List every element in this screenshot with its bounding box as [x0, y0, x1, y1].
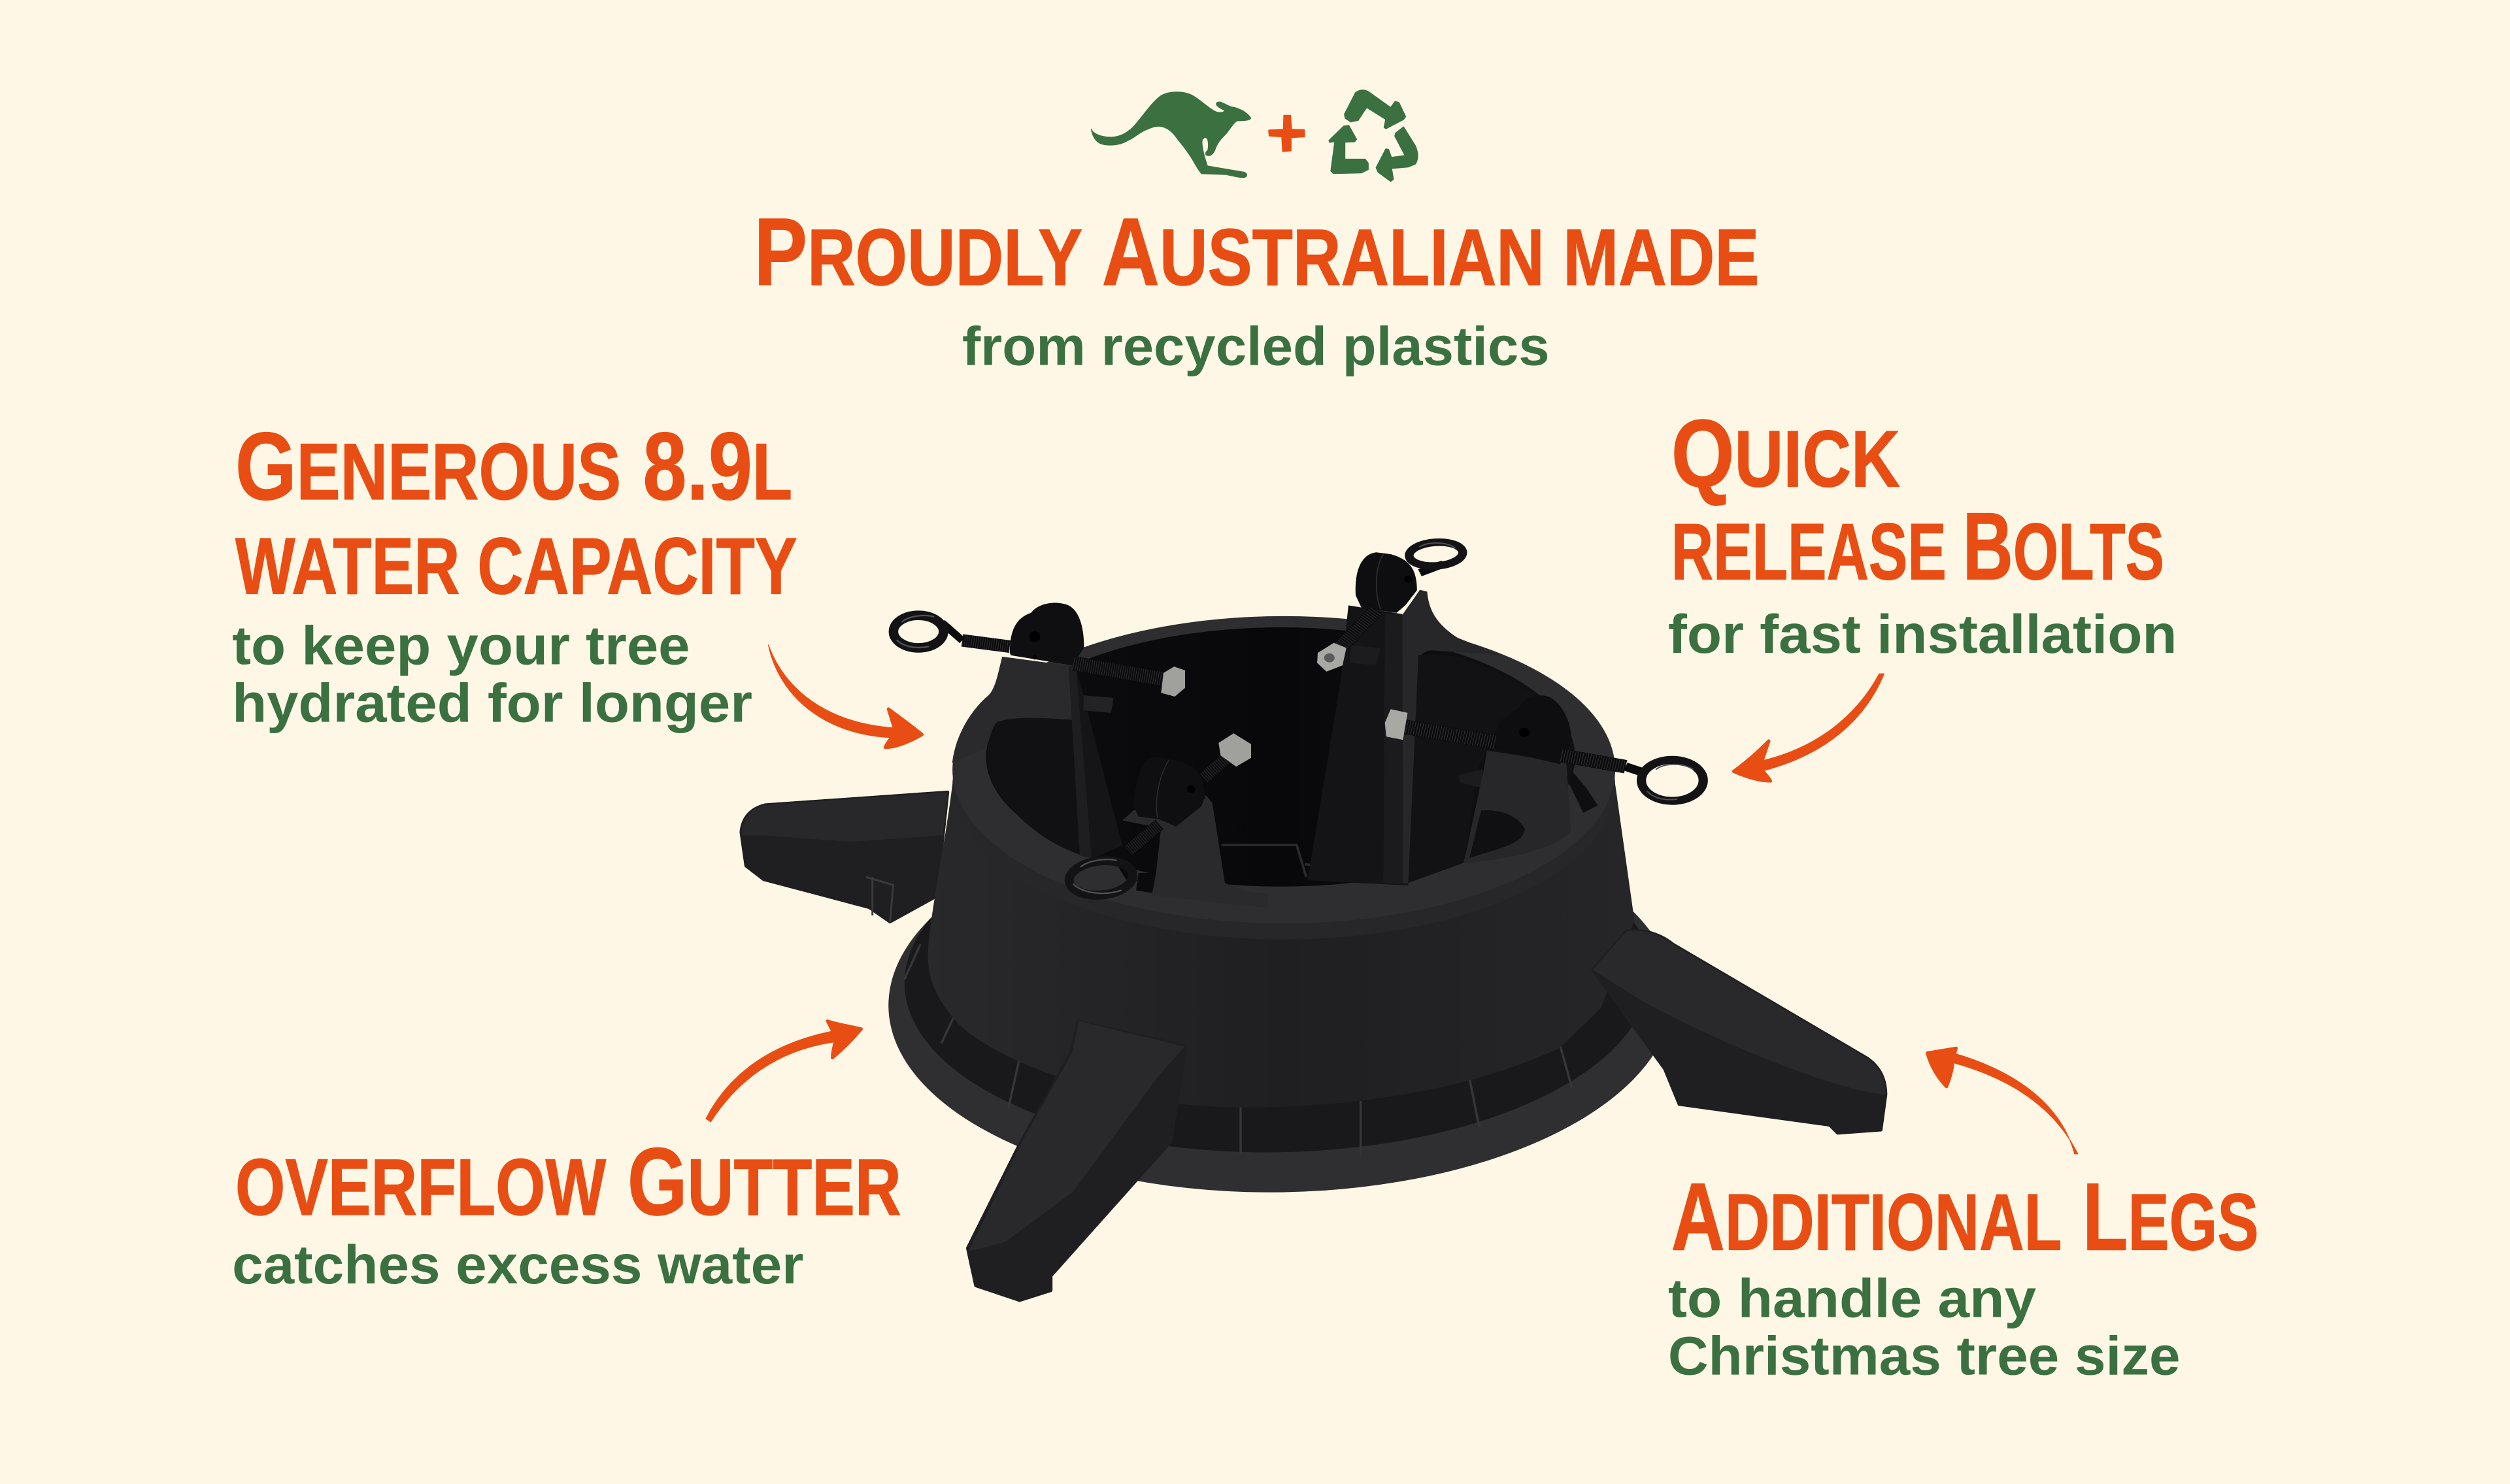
heading: quick release bolts: RELEASE BOLTS	[1671, 493, 2164, 601]
heading: quick release bolts	[1671, 401, 2164, 601]
text: additional legs detail: to handle any	[1668, 1268, 2036, 1329]
tank body	[928, 784, 1634, 1108]
text: water capacity detail	[232, 615, 752, 734]
left leg	[741, 792, 948, 922]
heading: additional legs: ADDITIONAL LEGS	[1671, 1164, 2259, 1271]
bolt: back left	[894, 616, 1185, 697]
text: water capacity detail: to keep your tree	[232, 615, 690, 676]
post: front	[1122, 757, 1268, 908]
icon: plus	[1269, 116, 1305, 152]
front brackets drawn in local crop coordinates	[894, 603, 1268, 908]
arrow: overflow gutter	[706, 1021, 862, 1122]
tank interior	[986, 627, 1575, 887]
arrow: quick release bolts	[1733, 674, 1884, 781]
front left leg	[969, 1021, 1184, 1300]
post: back left	[952, 603, 1122, 859]
callout: quick release bolts	[1668, 401, 2177, 665]
arrow: water capacity	[769, 645, 922, 748]
title: PROUDLY AUSTRALIAN MADE	[754, 199, 1759, 306]
text: water capacity detail: hydrated for longer	[232, 673, 752, 734]
text: quick release detail: for fast installation	[1668, 604, 2177, 665]
post: right	[1458, 695, 1598, 863]
back brackets drawn in local crop coordinates	[1307, 540, 1703, 885]
callout: additional legs	[1668, 1164, 2259, 1387]
overflow tray	[885, 797, 1676, 1199]
tank rim band	[952, 632, 1615, 940]
icon: recycling arrows	[1330, 90, 1418, 181]
heading: water capacity: GENEROUS 8.9L	[235, 413, 792, 520]
bolt: front	[1067, 733, 1251, 898]
heading: overflow gutter: OVERFLOW GUTTER	[235, 1129, 901, 1236]
heading: water capacity: WATER CAPACITY	[235, 521, 797, 611]
callout: water capacity	[232, 413, 797, 734]
product: Christmas tree stand	[741, 540, 1886, 1300]
arrow: additional legs	[1928, 1048, 2078, 1154]
heading: quick release bolts: QUICK	[1671, 401, 1900, 508]
tank rim	[952, 616, 1615, 923]
text: overflow gutter detail: catches excess water	[232, 1234, 803, 1295]
icon: kangaroo	[1091, 92, 1250, 178]
subtitle: from recycled plastics	[962, 316, 1550, 376]
text: additional legs detail	[1668, 1268, 2181, 1387]
heading: water capacity	[235, 413, 797, 611]
bolt: back right	[1317, 540, 1464, 672]
logo icons: kangaroo plus recycling symbol	[1091, 90, 1418, 181]
text: additional legs detail: Christmas tree size	[1668, 1326, 2181, 1387]
post: back right	[1307, 552, 1548, 885]
interior floor	[1222, 845, 1377, 877]
right leg	[1593, 931, 1886, 1133]
bolt: right	[1385, 709, 1703, 801]
callout: overflow gutter	[232, 1129, 901, 1295]
